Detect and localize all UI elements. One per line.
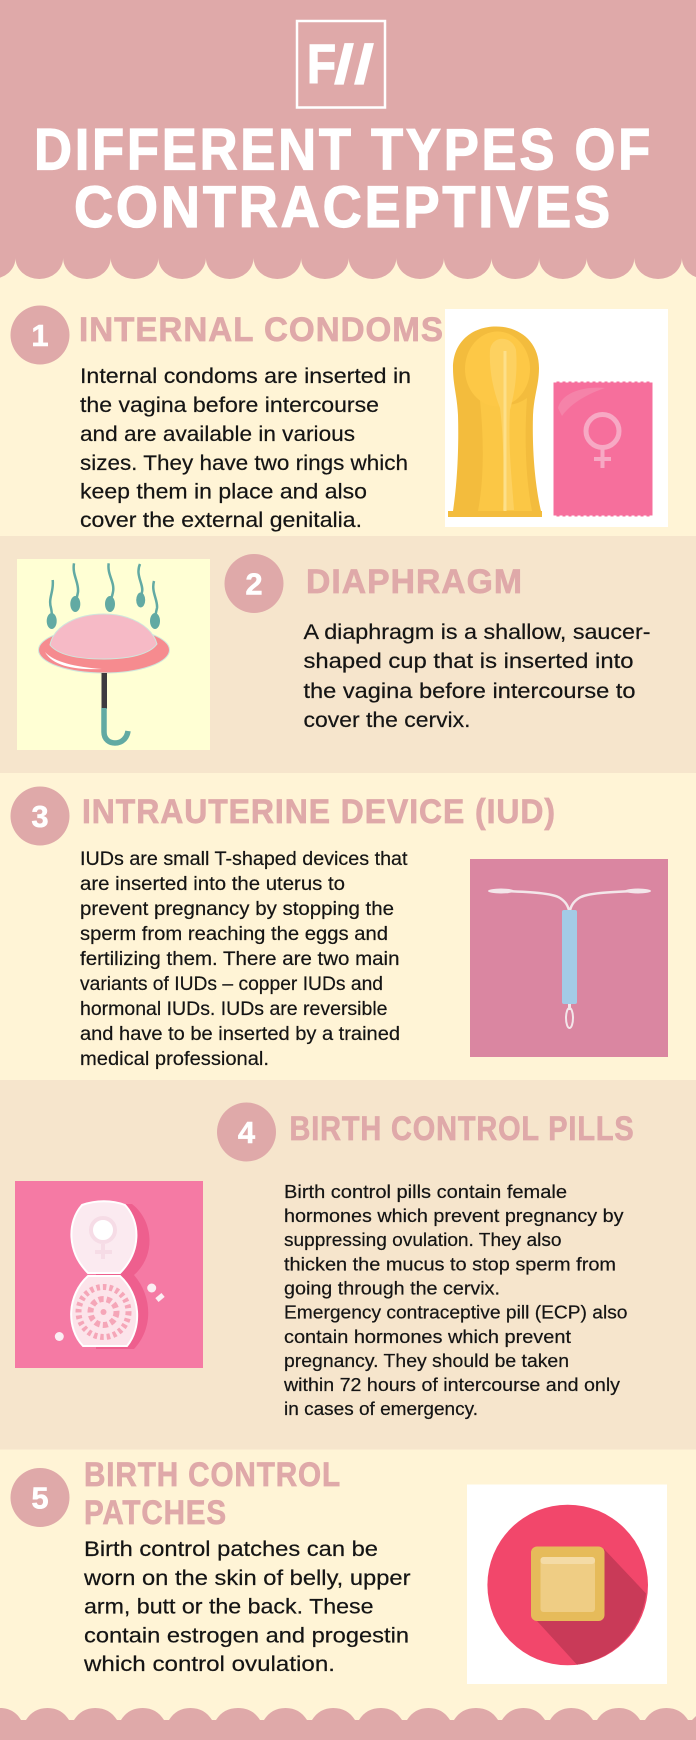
number badge 2: 2 xyxy=(245,566,263,602)
text: birth control patches description xyxy=(83,1538,411,1676)
number badge 4: 4 xyxy=(238,1115,256,1150)
title xyxy=(34,118,653,240)
text: internal condoms description xyxy=(80,365,411,532)
text: birth control patches description: which control ovulation. xyxy=(83,1653,335,1676)
image: internal condom and packet xyxy=(445,309,668,527)
text: birth control patches description: arm, butt or the back. These xyxy=(84,1596,374,1618)
text: internal condoms description: cover the external genitalia. xyxy=(80,509,362,532)
text: birth control patches description: worn on the skin of belly, upper xyxy=(83,1567,411,1590)
text: internal condoms description: Internal condoms are inserted in xyxy=(80,365,411,388)
number badge 4 xyxy=(217,1102,276,1162)
top shell xyxy=(71,1201,136,1273)
heading: birth control patches: PATCHES xyxy=(84,1494,227,1532)
text: birth control pills description: suppressing ovulation. They also xyxy=(284,1230,562,1250)
image: diaphragm umbrella with sperm xyxy=(17,559,210,750)
text: diaphragm description: shaped cup that is inserted into xyxy=(304,650,634,673)
title: CONTRACEPTIVES xyxy=(74,175,613,240)
icon: condom packet xyxy=(554,382,652,516)
text: birth control pills description: contain hormones which prevent xyxy=(284,1327,571,1347)
text: IUD description: fertilizing them. There are two main xyxy=(80,949,400,970)
number badge 5: 5 xyxy=(31,1480,49,1516)
number badge 3 xyxy=(10,786,70,846)
panel: footer scallop band xyxy=(0,1708,696,1740)
title: DIFFERENT TYPES OF xyxy=(34,118,653,182)
text: diaphragm description: the vagina before intercourse to xyxy=(304,680,636,703)
number badge 5 xyxy=(10,1468,70,1527)
panel: internal condoms xyxy=(10,306,668,532)
heading: birth control patches xyxy=(84,1456,341,1532)
text: IUD description: medical professional. xyxy=(80,1049,269,1070)
heading: birth control pills: BIRTH CONTROL PILLS xyxy=(290,1110,634,1148)
icon: F// logo: F xyxy=(307,33,336,95)
heading: birth control patches: BIRTH CONTROL xyxy=(84,1456,341,1494)
heading: internal condoms: INTERNAL CONDOMS xyxy=(79,311,444,349)
text: IUD description: variants of IUDs – copper IUDs and xyxy=(80,974,383,995)
panel: header banner xyxy=(0,0,696,279)
text: IUD description: sperm from reaching the eggs and xyxy=(80,924,388,945)
text: birth control patches description: Birth control patches can be xyxy=(84,1538,378,1561)
text: internal condoms description: keep them in place and also xyxy=(80,480,367,504)
number badge 2 xyxy=(224,554,284,613)
icon: F// logo: // xyxy=(334,33,374,95)
text: IUD description: are inserted into the uterus to xyxy=(80,874,345,895)
text: birth control pills description: thicken the mucus to stop sperm from xyxy=(284,1254,616,1274)
text: IUD description: prevent pregnancy by stopping the xyxy=(80,899,394,920)
text: birth control pills description xyxy=(283,1182,628,1419)
text: birth control pills description: going through the cervix. xyxy=(284,1278,500,1298)
text: internal condoms description: and are available in various xyxy=(80,423,355,446)
text: birth control pills description: hormones which prevent pregnancy by xyxy=(284,1206,624,1226)
heading: diaphragm: DIAPHRAGM xyxy=(306,563,523,601)
text: internal condoms description: the vagina before intercourse xyxy=(80,394,379,417)
image: IUD xyxy=(470,859,668,1057)
text: internal condoms description: sizes. They have two rings which xyxy=(80,452,408,475)
text: IUD description: hormonal IUDs. IUDs are reversible xyxy=(80,999,388,1020)
panel: diaphragm xyxy=(0,536,696,773)
text: IUD description: IUDs are small T-shaped devices that xyxy=(80,849,408,870)
image: patch icon xyxy=(467,1484,667,1684)
heading: intrauterine device: INTRAUTERINE DEVICE (IUD) xyxy=(82,793,556,831)
text: birth control pills description: pregnancy. They should be taken xyxy=(284,1351,569,1371)
panel: intrauterine device xyxy=(10,786,668,1070)
icon: F// logo xyxy=(297,21,385,108)
text: birth control patches description: contain estrogen and progestin xyxy=(84,1624,409,1648)
text: diaphragm description xyxy=(304,621,651,732)
number badge 3: 3 xyxy=(31,799,49,834)
text: birth control pills description: in cases of emergency. xyxy=(284,1399,478,1419)
text: birth control pills description: Birth control pills contain female xyxy=(284,1182,567,1202)
text: IUD description: and have to be inserted by a trained xyxy=(80,1024,400,1045)
number badge 1 xyxy=(10,306,70,364)
number badge 1: 1 xyxy=(31,318,49,353)
text: diaphragm description: cover the cervix. xyxy=(304,709,470,732)
text: birth control pills description: within 72 hours of intercourse and only xyxy=(283,1375,620,1395)
panel: birth control patches xyxy=(10,1456,667,1684)
bottom shell with pills xyxy=(71,1276,137,1346)
panel: birth control pills xyxy=(0,1080,696,1450)
text: IUD description xyxy=(80,849,408,1070)
image: birth control pill case xyxy=(15,1181,203,1368)
text: birth control pills description: Emergency contraceptive pill (ECP) also xyxy=(284,1302,628,1322)
text: diaphragm description: A diaphragm is a shallow, saucer- xyxy=(304,621,651,644)
